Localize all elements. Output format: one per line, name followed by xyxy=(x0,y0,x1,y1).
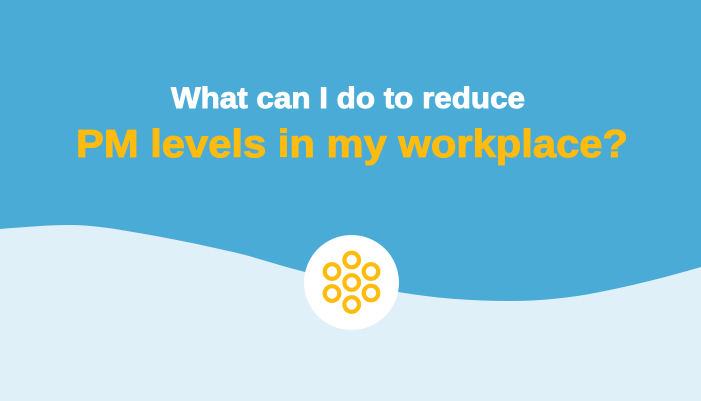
title line one: What can I do to reduce xyxy=(171,82,525,115)
light wave panel xyxy=(0,225,701,401)
icon: particulate matter badge xyxy=(304,235,399,330)
title line two: PM levels in my workplace? xyxy=(76,123,628,166)
